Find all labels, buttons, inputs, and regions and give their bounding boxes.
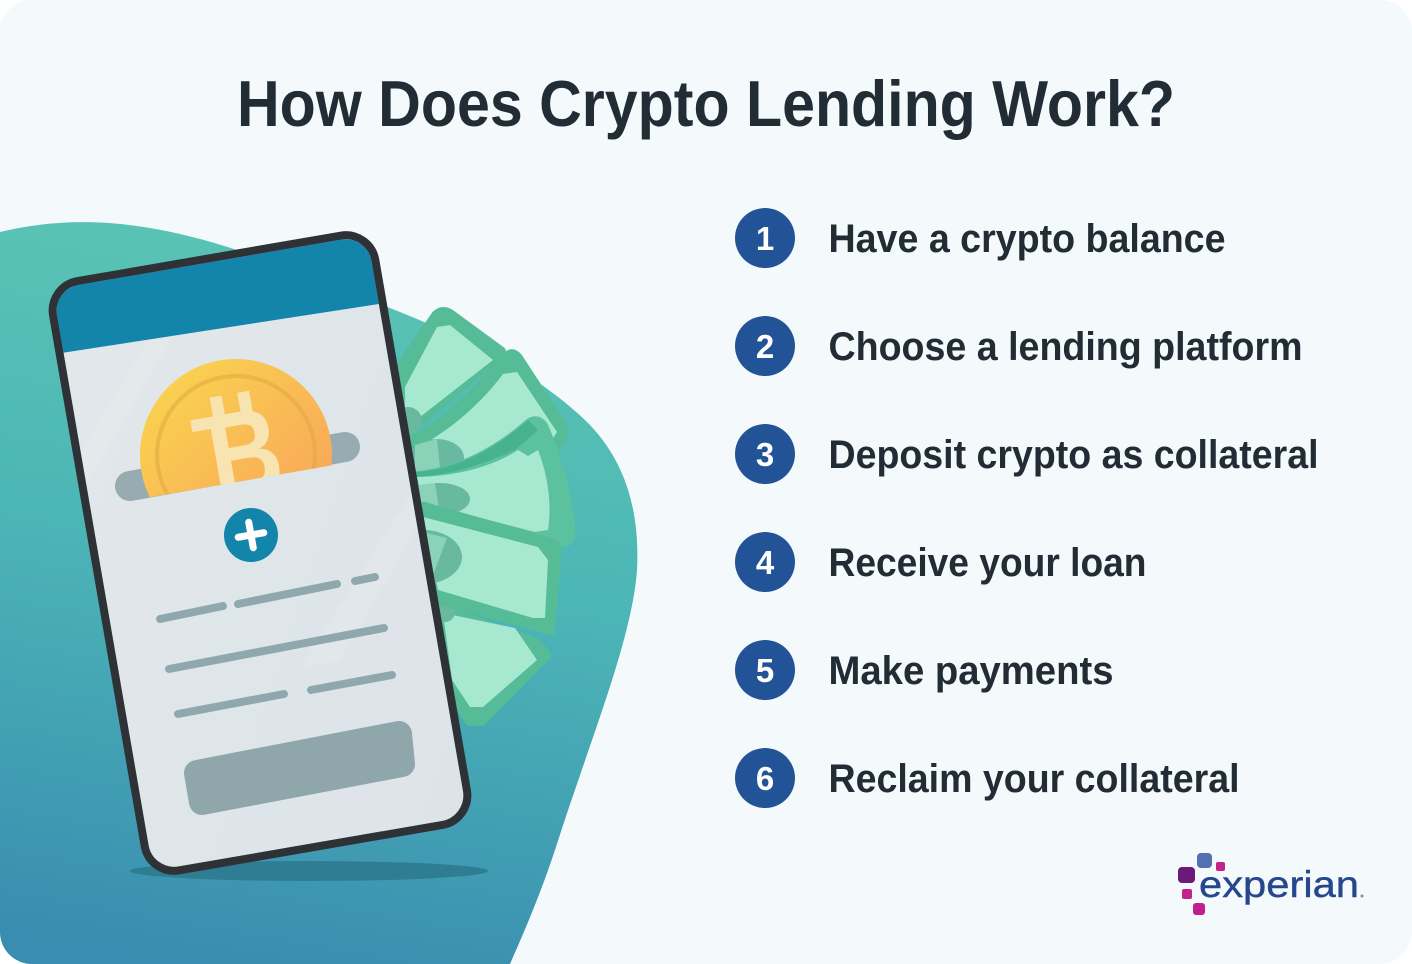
step 5: 5: [756, 652, 774, 689]
step 3: [735, 424, 1318, 484]
step 6: Reclaim your collateral: [828, 757, 1240, 801]
step 2: 2: [756, 328, 774, 365]
phone screen: [48, 231, 472, 875]
step 6: 6: [756, 760, 774, 797]
plus button: [224, 508, 278, 562]
bitcoin symbol: [190, 390, 280, 485]
step 1: Have a crypto balance: [828, 217, 1226, 261]
step 1: 1: [756, 220, 774, 257]
step 4: 4: [756, 544, 775, 581]
step 5: Make payments: [828, 649, 1114, 693]
phone screen header: [41, 228, 448, 700]
banknote 5: [430, 602, 545, 720]
bitcoin symbol: B: [198, 380, 292, 527]
banknote 3 portrait: [410, 483, 470, 516]
banknote 4 portrait: [384, 530, 462, 585]
phone form lines: [160, 577, 392, 714]
step 5: [735, 640, 1114, 700]
phone ground shadow: [130, 861, 488, 881]
banknote 4: [384, 503, 560, 634]
step 2: Choose a lending platform: [828, 325, 1302, 369]
phone: [41, 228, 478, 877]
background teal blob: [0, 222, 637, 964]
banknote 2: [405, 351, 567, 500]
bitcoin coin: [140, 359, 332, 498]
coin slot: [130, 447, 345, 486]
step 3: 3: [756, 436, 774, 473]
title: How Does Crypto Lending Work?: [237, 67, 1175, 140]
step 6: [735, 748, 1240, 808]
step 1: [735, 208, 1226, 268]
step 4: [735, 532, 1146, 592]
step 3: Deposit crypto as collateral: [828, 433, 1318, 477]
illustration: fan of banknotes: [384, 313, 574, 720]
step 2: [735, 316, 1302, 376]
phone action button: [197, 734, 402, 802]
experian logo: [1178, 853, 1364, 915]
banknote 3: [410, 418, 574, 546]
experian logo: experian: [1199, 864, 1359, 905]
banknote 5 portrait: [435, 602, 455, 622]
banknote 1: [394, 313, 500, 435]
step 4: Receive your loan: [828, 541, 1146, 585]
phone frame: [48, 231, 472, 875]
banknote 2 portrait: [410, 439, 464, 477]
banknote 1 portrait: [394, 407, 422, 435]
